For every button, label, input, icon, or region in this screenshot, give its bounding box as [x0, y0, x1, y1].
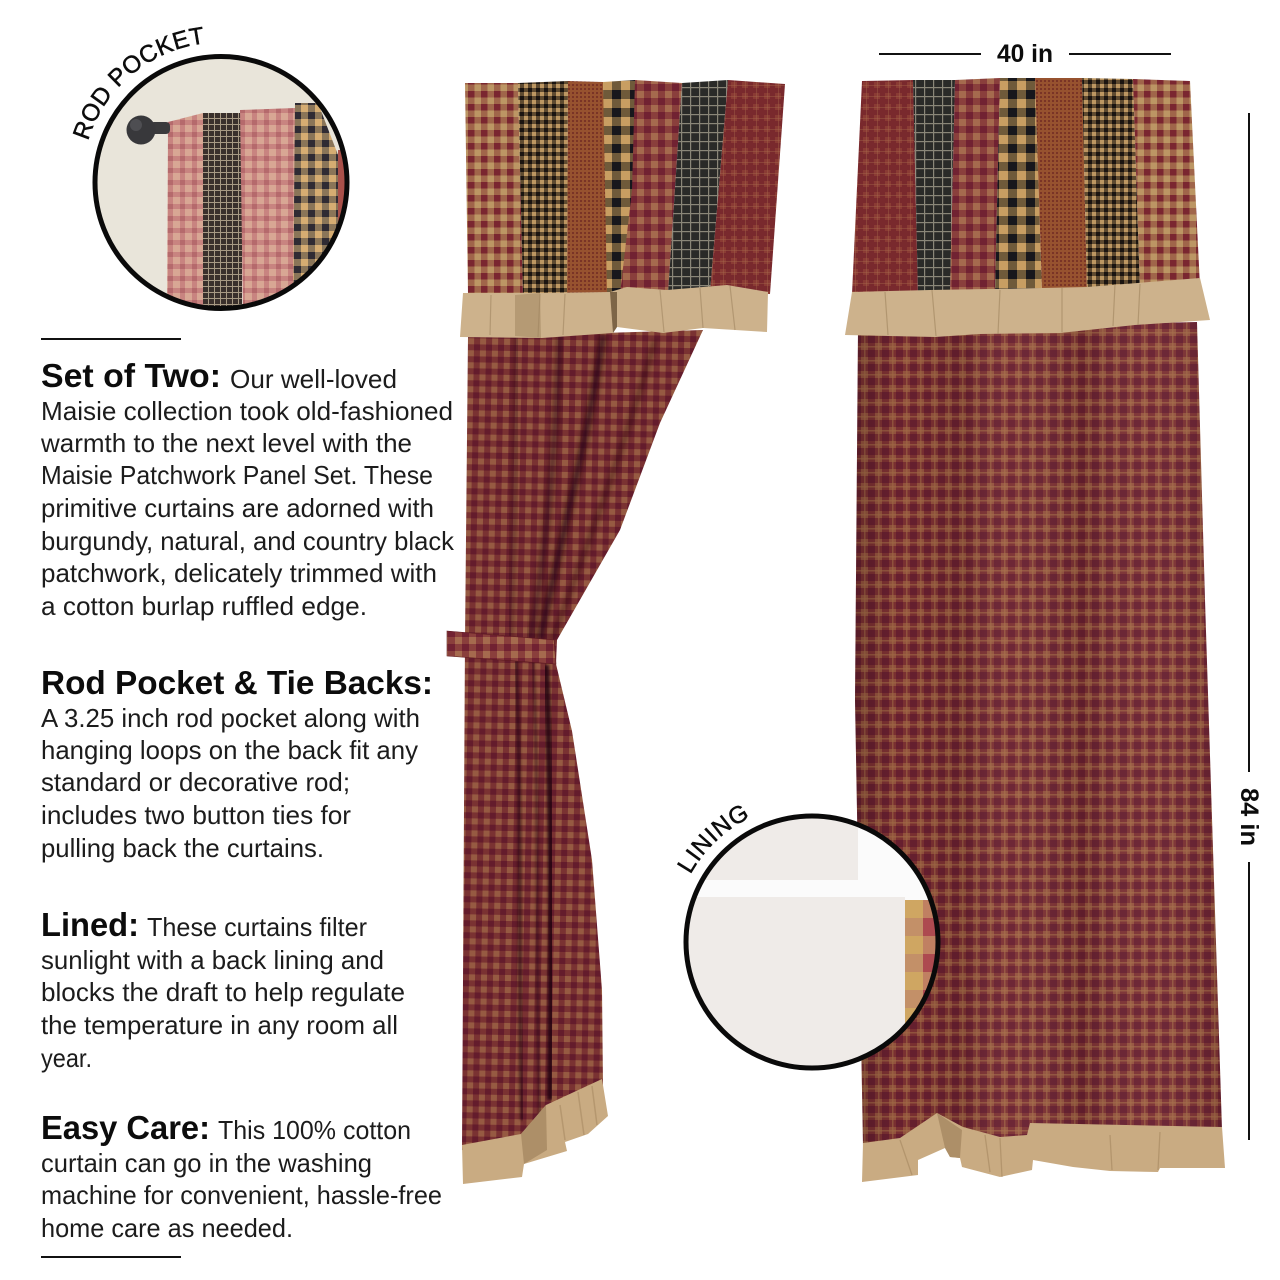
circular arc label: LINING [677, 806, 748, 874]
detail photo [98, 59, 344, 306]
text block: Set of Two [40, 357, 455, 621]
valance ruffle [845, 278, 1210, 337]
text block: Set of Two: Our well-loved [230, 364, 397, 394]
callout: rod pocket detail [72, 26, 350, 311]
top divider rule [41, 338, 181, 340]
callout: lining detail [677, 806, 940, 1070]
width dimension: 40 in: 40 in [997, 40, 1053, 68]
circular arc label: ROD POCKET [72, 26, 202, 140]
bottom ruffle [862, 1113, 1225, 1182]
text block: Lined: These curtains filter [147, 912, 367, 942]
curtain body [855, 322, 1222, 1146]
text block: Set of Two: a cotton burlap ruffled edge. [41, 591, 367, 621]
text block: Easy Care [41, 1109, 442, 1243]
right curtain: patchwork valance [845, 78, 1210, 337]
text block: Lined [41, 906, 405, 1073]
tie back band [447, 631, 556, 664]
text block: Lined: sunlight with a back lining and [41, 945, 384, 975]
bottom divider rule [41, 1256, 181, 1258]
circle outline [686, 816, 938, 1068]
curtain body with gathered drape [462, 330, 703, 1150]
valance ruffle [460, 285, 768, 338]
text block: Rod Pocket and Tie Backs: pulling back the curtains. [41, 833, 324, 863]
text block: Set of Two: Maisie Patchwork Panel Set. These [41, 460, 433, 490]
text block: Lined: blocks the draft to help regulate [41, 977, 405, 1007]
text block: Rod Pocket and Tie Backs: includes two button ties for [41, 800, 351, 830]
patch panels [852, 78, 1200, 294]
text block: Rod Pocket and Tie Backs: hanging loops on the back fit any [41, 735, 418, 765]
text block: Lined: Lined: [41, 906, 139, 943]
left curtain: patchwork valance [460, 80, 785, 338]
patch panels [465, 80, 785, 295]
circle outline [95, 56, 347, 308]
text block: Set of Two: Maisie collection took old-fashioned [41, 396, 453, 426]
detail photo [688, 818, 936, 1066]
text block: Easy Care: machine for convenient, hassle-free [41, 1180, 442, 1210]
height dimension: 84 in: 84 in [1235, 788, 1263, 846]
right curtain: flat full panel [855, 322, 1225, 1182]
text block: Easy Care: curtain can go in the washing [41, 1148, 372, 1178]
bottom ruffle [462, 1079, 608, 1184]
text block: Set of Two: warmth to the next level with the [40, 428, 412, 458]
text block: Rod Pocket and Tie Backs: Rod Pocket & Tie Backs: [41, 664, 433, 701]
text block: Rod Pocket and Tie Backs [41, 664, 433, 863]
text block: Lined: the temperature in any room all [41, 1010, 398, 1040]
text block: Set of Two: patchwork, delicately trimmed with [41, 558, 437, 588]
text block: Lined: year. [41, 1043, 92, 1073]
text block: Set of Two: primitive curtains are adorned with [41, 493, 434, 523]
text block: Rod Pocket and Tie Backs: A 3.25 inch rod pocket along with [41, 703, 420, 733]
text block: Easy Care: This 100% cotton [218, 1115, 411, 1145]
left curtain: tied back panel [447, 330, 703, 1184]
text block: Easy Care: home care as needed. [41, 1213, 293, 1243]
text block: Rod Pocket and Tie Backs: standard or decorative rod; [41, 767, 350, 797]
text block: Easy Care: Easy Care: [41, 1109, 210, 1146]
text block: Set of Two: burgundy, natural, and country black [41, 526, 455, 556]
text block: Set of Two: Set of Two: [41, 357, 221, 394]
